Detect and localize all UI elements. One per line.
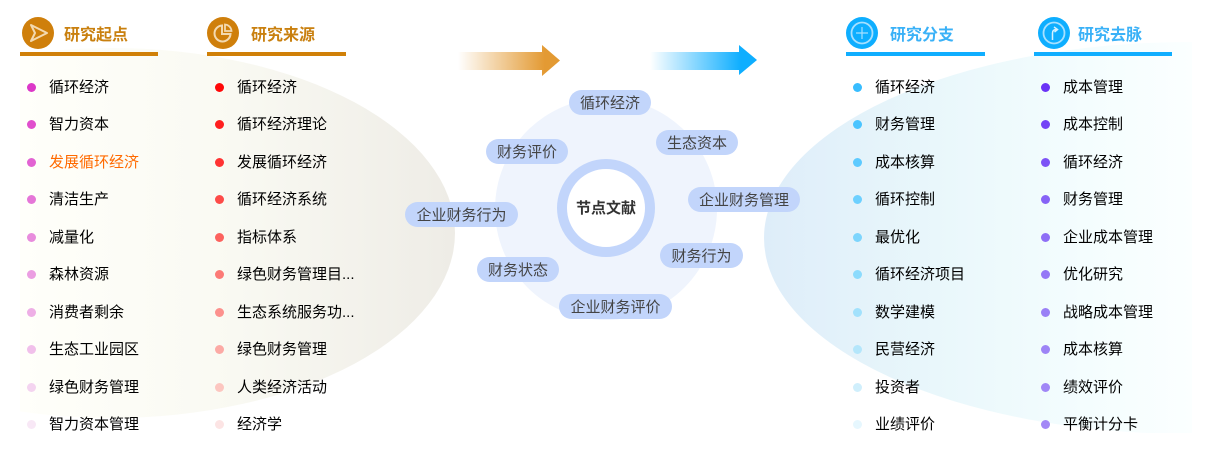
list item: 绿色财务管理目... — [237, 266, 355, 283]
arrow: blue — [650, 45, 757, 75]
list item: 循环经济理论 — [237, 116, 327, 133]
list item: 发展循环经济 — [49, 154, 139, 171]
list item: 企业成本管理 — [1063, 229, 1153, 246]
list item — [1034, 188, 1184, 211]
list item — [853, 379, 920, 396]
list item: 成本控制 — [1063, 116, 1123, 133]
right ellipse — [764, 44, 1130, 432]
icon: turn arrow circle — [1038, 17, 1070, 49]
list item: 生态系统服务功... — [237, 304, 355, 321]
icon: plus circle — [846, 17, 878, 49]
heading: 研究起点 — [20, 17, 158, 56]
keyword pill — [486, 139, 568, 164]
keyword pill — [656, 130, 738, 155]
keyword pill — [405, 202, 518, 227]
list item — [1034, 151, 1184, 174]
central label: 节点文献 — [576, 200, 636, 217]
list item — [27, 229, 94, 246]
keyword pill: 财务状态 — [488, 262, 548, 279]
keyword pill: 生态资本 — [667, 135, 727, 152]
list item — [1034, 376, 1184, 399]
heading: 研究去脉 — [1034, 14, 1184, 56]
list item: 民营经济 — [875, 341, 935, 358]
list item — [1034, 413, 1184, 436]
list item: 战略成本管理 — [1063, 304, 1153, 321]
list item: 减量化 — [49, 229, 94, 246]
keyword pill: 企业财务评价 — [570, 299, 660, 316]
central disc — [495, 98, 717, 320]
list item: 绿色财务管理 — [237, 341, 327, 358]
keyword pill — [569, 90, 651, 115]
panel: 研究去脉 — [1034, 17, 1172, 431]
list item: 成本核算 — [1063, 341, 1123, 358]
keyword pill — [688, 187, 800, 212]
icon: pie chart — [207, 17, 239, 49]
panel: 研究起点 — [20, 17, 158, 431]
keyword pill: 财务行为 — [671, 248, 732, 265]
list item: 人类经济活动 — [237, 379, 327, 396]
central ring — [562, 164, 650, 252]
background shapes — [102, 44, 1130, 432]
list item — [1034, 226, 1184, 249]
keyword pill — [660, 243, 743, 268]
list item: 投资者 — [875, 379, 920, 396]
list item: 循环控制 — [875, 191, 935, 208]
list item: 成本管理 — [1063, 79, 1123, 96]
list item — [215, 416, 282, 431]
list item: 成本核算 — [875, 154, 935, 171]
list item — [1034, 113, 1184, 136]
heading: 研究来源 — [207, 17, 346, 56]
panel: 研究分支 — [846, 17, 985, 431]
list item: 财务管理 — [1063, 191, 1123, 208]
heading: 研究分支 — [846, 17, 985, 56]
list item: 循环经济系统 — [237, 191, 327, 208]
keyword pill: 企业财务行为 — [416, 207, 506, 224]
heading: 研究分支: 研究分支 — [890, 27, 954, 44]
keyword pill — [559, 294, 672, 319]
keyword pill — [477, 257, 559, 282]
panel: 研究来源 — [207, 17, 355, 431]
left ellipse — [102, 48, 455, 418]
list item: 生态工业园区 — [49, 341, 139, 358]
list item: 财务管理 — [875, 116, 935, 133]
list item: 循环经济 — [875, 79, 935, 96]
list item — [1034, 76, 1184, 99]
list item: 森林资源 — [49, 266, 109, 283]
list item: 发展循环经济 — [237, 154, 327, 171]
list item: 消费者剩余 — [49, 304, 124, 321]
list item: 循环经济 — [49, 79, 109, 96]
list item: 循环经济项目 — [875, 266, 965, 283]
list item: 智力资本 — [49, 116, 109, 133]
list item: 绿色财务管理 — [49, 379, 139, 396]
heading: 研究来源: 研究来源 — [251, 27, 315, 44]
list item: 绩效评价 — [1063, 379, 1123, 396]
list item: 循环经济 — [1063, 154, 1123, 171]
list item: 最优化 — [875, 229, 920, 246]
list item — [1034, 263, 1184, 286]
list item — [1034, 301, 1184, 324]
list item — [1034, 338, 1184, 361]
arrow: orange — [458, 45, 560, 76]
keyword pill: 企业财务管理 — [699, 192, 789, 209]
list item: 数学建模 — [875, 304, 935, 321]
keyword pill: 财务评价 — [497, 144, 557, 161]
list item: 优化研究 — [1063, 266, 1123, 283]
keyword pill: 循环经济 — [580, 95, 640, 112]
icon: send arrow — [22, 17, 54, 49]
list item — [853, 229, 920, 246]
heading: 研究起点: 研究起点 — [64, 27, 128, 44]
list item: 清洁生产 — [49, 191, 109, 208]
heading: 研究去脉: 研究去脉 — [1078, 27, 1142, 44]
list item: 指标体系 — [237, 229, 297, 246]
list item: 循环经济 — [237, 79, 297, 96]
